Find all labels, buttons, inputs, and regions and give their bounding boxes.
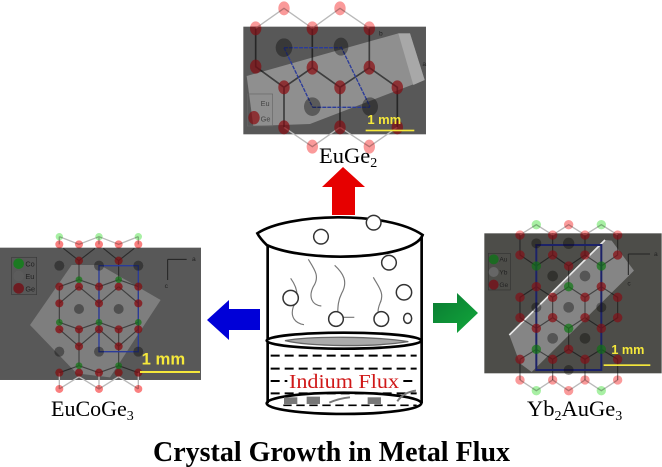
axes: a <box>192 256 196 263</box>
scale bar: 1 mm <box>367 112 401 127</box>
flux dash lines <box>271 356 417 393</box>
lattice atoms <box>54 233 143 393</box>
legend box: Ge <box>261 114 270 123</box>
crystal <box>30 265 161 377</box>
illustration: beaker with indium flux <box>257 215 423 414</box>
scale bar: 1 mm <box>611 343 644 357</box>
lattice atoms <box>248 1 403 154</box>
scale bar <box>140 349 200 373</box>
legend box <box>247 94 273 126</box>
axes: c <box>627 280 631 287</box>
axes: c <box>165 283 169 290</box>
axes: a <box>654 251 658 258</box>
panel: Yb2AuGe3 crystal micrograph with lattice <box>484 220 662 395</box>
arrow: red up <box>322 167 365 215</box>
axes <box>627 251 658 287</box>
growth strands <box>291 259 382 325</box>
scale bar: 1 mm <box>142 349 185 368</box>
liquid surface <box>267 333 421 349</box>
label: EuGe2: 2 <box>370 156 377 171</box>
label: Yb2AuGe3: AuGe <box>562 396 615 421</box>
crystal <box>247 33 425 126</box>
legend: Yb <box>499 269 508 276</box>
legend: Co <box>25 260 35 269</box>
axis letters: b <box>379 30 383 37</box>
arrow: green right <box>433 293 478 333</box>
legend: Au <box>499 257 508 264</box>
axes <box>165 256 196 290</box>
legend: Ge <box>499 282 509 289</box>
lattice bonds <box>256 8 397 147</box>
crystal <box>509 240 634 372</box>
micrograph background <box>243 27 426 134</box>
label: Yb2AuGe3: 2 <box>554 409 562 424</box>
label: Yb2AuGe3: 3 <box>615 409 622 424</box>
label: EuCoGe3: EuCoGe <box>51 396 127 421</box>
axis letters <box>379 30 426 68</box>
label: Indium Flux: Indium Flux <box>289 372 399 393</box>
panel: EuCoGe3 crystal micrograph with lattice <box>0 233 201 393</box>
lattice bonds <box>59 237 138 389</box>
lattice bonds <box>520 225 618 391</box>
crucible bottom <box>267 391 421 414</box>
legend: Ge <box>25 284 35 293</box>
lattice atoms <box>515 220 622 395</box>
legend <box>488 253 510 290</box>
legend <box>12 257 37 295</box>
label: EuCoGe3: 3 <box>127 409 134 424</box>
scale bar <box>366 112 414 131</box>
label: EuGe2: EuGe <box>319 143 370 168</box>
micrograph background <box>0 248 201 380</box>
label: Yb2AuGe3: Yb <box>527 396 554 421</box>
panel: EuGe2 crystal micrograph with lattice <box>243 1 426 154</box>
legend: Eu <box>25 272 34 281</box>
beaker rim <box>257 217 423 257</box>
legend box: Eu <box>261 99 270 108</box>
scale bar <box>604 343 650 366</box>
beaker walls <box>268 237 422 403</box>
axis letters: a <box>422 61 426 68</box>
bubbles <box>283 215 412 326</box>
arrow: blue left <box>207 300 260 340</box>
micrograph background <box>484 233 662 373</box>
